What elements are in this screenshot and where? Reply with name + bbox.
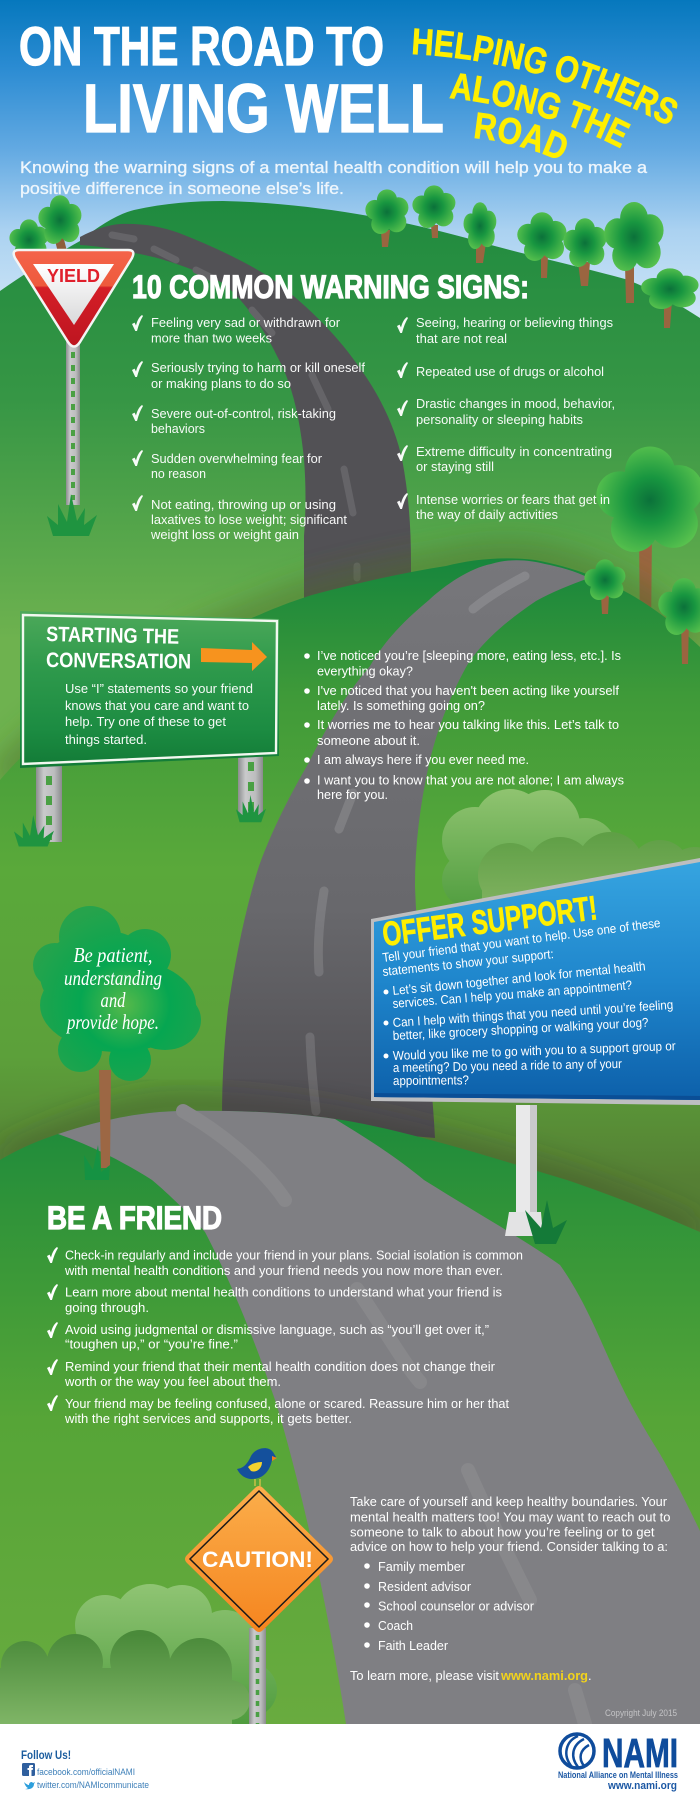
- self care text: Faith Leader: [378, 1638, 449, 1653]
- warning signs left column: no reason: [151, 466, 206, 481]
- heading: warning signs: 10 COMMON WARNING SIGNS:: [132, 269, 529, 305]
- billboard: offer support: a meeting? Do you need a ride to any of your: [393, 1056, 623, 1075]
- billboard: offer support: Would you like me to go with you to a support group or: [393, 1038, 677, 1063]
- icon: twitter: [24, 1782, 35, 1789]
- intro text: Knowing the warning signs of a mental health condition will help you to make a: [20, 158, 648, 177]
- self care text: mental health matters too! You may want to reach out to: [350, 1510, 670, 1524]
- yield sign: YIELD: [47, 266, 100, 286]
- self care text: Take care of yourself and keep healthy boundaries. Your: [350, 1494, 668, 1509]
- middle road: [222, 560, 589, 1138]
- tree text: understanding: [64, 966, 162, 990]
- self care text: .: [588, 1668, 592, 1683]
- warning signs left column: weight loss or weight gain: [150, 527, 299, 542]
- bush bottom left: [0, 1584, 277, 1724]
- self care text: To learn more, please visit: [350, 1668, 499, 1683]
- warning signs right column: [397, 315, 615, 522]
- self care text: School counselor or advisor: [378, 1598, 535, 1614]
- billboard: offer support: better, like grocery shopping or walking your dog?: [392, 1015, 649, 1043]
- self care text: Coach: [378, 1618, 413, 1633]
- small trees on middle hill: [584, 559, 700, 664]
- conversation statements: here for you.: [317, 787, 388, 802]
- green sign: starting the conversation: Use “I” statements so your friend: [65, 681, 253, 696]
- warning signs left column: Not eating, throwing up or using: [151, 497, 336, 512]
- warning signs right column: Intense worries or fears that get in: [416, 492, 610, 507]
- warning signs left column: behaviors: [151, 421, 205, 436]
- conversation statements: It worries me to hear you talking like this. Let’s talk to: [317, 717, 619, 732]
- warning signs left column: laxatives to lose weight; significant: [151, 512, 347, 527]
- billboard: offer support: appointments?: [393, 1072, 469, 1088]
- trees on far hill: [9, 185, 699, 328]
- sky background: [0, 0, 700, 330]
- be a friend list: worth or the way you feel about them.: [64, 1374, 281, 1389]
- warning signs right column: Seeing, hearing or believing things: [416, 315, 613, 330]
- self care text: www.nami.org: [500, 1668, 588, 1683]
- title: LIVING WELL: [83, 70, 444, 147]
- be a friend list: going through.: [65, 1300, 149, 1315]
- warning signs right column: Drastic changes in mood, behavior,: [416, 396, 615, 411]
- be a friend list: [47, 1247, 523, 1426]
- be a friend list: with the right services and supports, it gets better.: [64, 1411, 352, 1426]
- conversation statements: I want you to know that you are not alone; I am always: [317, 772, 624, 788]
- intro text: [20, 158, 648, 198]
- warning signs right column: Extreme difficulty in concentrating: [416, 444, 612, 459]
- arrow: [201, 642, 267, 671]
- warning signs right column: that are not real: [416, 331, 507, 346]
- tree text: Be patient,: [74, 943, 152, 967]
- warning signs right column: personality or sleeping habits: [416, 412, 583, 427]
- self care text: Resident advisor: [378, 1579, 472, 1594]
- hill shadow: [0, 1105, 700, 1232]
- tree text: and: [100, 988, 126, 1012]
- yield sign: [14, 250, 133, 536]
- green sign: starting the conversation: help. Try one of these to get: [65, 714, 226, 729]
- footer band: [0, 1724, 700, 1812]
- follow us: twitter.com/NAMIcommunicate: [37, 1780, 149, 1791]
- subtitle: helping others along the road: ALONG THE: [449, 73, 631, 148]
- warning signs right column: or staying still: [416, 459, 494, 474]
- be a friend list: Avoid using judgmental or dismissive language, such as “you’ll get over it,”: [65, 1322, 489, 1337]
- green sign: starting the conversation: CONVERSATION: [46, 649, 191, 674]
- title: [19, 15, 444, 147]
- follow us: [21, 1750, 149, 1791]
- tree text: [64, 943, 162, 1034]
- be a friend list: with mental health conditions and your friend needs you now more than ever.: [64, 1263, 503, 1278]
- warning signs left column: or making plans to do so: [151, 376, 291, 391]
- self care text: Family member: [378, 1559, 466, 1574]
- green sign: starting the conversation: [14, 611, 279, 846]
- conversation statements: I’ve noticed you’re [sleeping more, eating less, etc.]. Is: [317, 648, 621, 663]
- green sign: starting the conversation: STARTING THE: [46, 623, 179, 649]
- copyright: Copyright July 2015: [605, 1708, 677, 1718]
- icon: facebook: [22, 1763, 35, 1776]
- caution sign: CAUTION!: [202, 1547, 313, 1572]
- warning signs left column: Severe out-of-control, risk-taking: [151, 406, 336, 421]
- bushes behind billboard: [442, 789, 700, 925]
- billboard: offer support: [371, 858, 700, 1244]
- conversation statements: someone about it.: [317, 733, 420, 748]
- tree text: provide hope.: [65, 1010, 159, 1034]
- warning signs right column: Repeated use of drugs or alcohol: [416, 364, 604, 379]
- self care text: [350, 1494, 670, 1683]
- conversation statements: everything okay?: [317, 664, 413, 678]
- conversation statements: I've noticed that you haven't been acting like yourself: [317, 683, 619, 698]
- far road: [80, 224, 411, 620]
- self care text: someone to talk to about how you’re feeling or to get: [350, 1524, 655, 1540]
- warning signs left column: more than two weeks: [151, 330, 272, 346]
- billboard: offer support: Tell your friend that you want to help. Use one of these: [381, 915, 661, 965]
- warning signs left column: Seriously trying to harm or kill oneself: [151, 360, 365, 375]
- warning signs left column: Feeling very sad or withdrawn for: [151, 315, 341, 330]
- billboard: offer support: OFFER SUPPORT!: [380, 889, 599, 954]
- billboard: offer support: statements to show your support:: [382, 946, 554, 979]
- conversation statements: I am always here if you ever need me.: [317, 752, 529, 767]
- NAMI logo: [558, 1730, 678, 1792]
- front road: [58, 1111, 700, 1724]
- conversation statements: [304, 648, 624, 802]
- front hill: [0, 1111, 700, 1724]
- tree: right of warning signs: [596, 446, 700, 637]
- be a friend list: “toughen up,” or “you’re fine.”: [65, 1336, 238, 1352]
- billboard: offer support: Can I help with things that you need until you’re feeling: [392, 997, 674, 1030]
- intro text: positive difference in someone else’s life.: [20, 179, 344, 198]
- warning signs left column: [132, 315, 365, 542]
- be a friend list: Remind your friend that their mental health condition does not change their: [65, 1359, 496, 1374]
- hill shadow: [0, 558, 700, 780]
- billboard: offer support: services. Can I help you make an appointment?: [392, 977, 632, 1011]
- warning signs left column: Sudden overwhelming fear for: [151, 451, 323, 466]
- heading: be a friend: BE A FRIEND: [47, 1200, 222, 1236]
- follow us: Follow Us!: [21, 1750, 71, 1762]
- title: ON THE ROAD TO: [19, 15, 384, 77]
- follow us: facebook.com/officialNAMI: [37, 1767, 135, 1778]
- be a friend list: Learn more about mental health conditions to understand what your friend is: [65, 1284, 502, 1300]
- warning signs right column: the way of daily activities: [416, 507, 558, 522]
- be a friend list: Check-in regularly and include your friend in your plans. Social isolation is common: [65, 1248, 523, 1262]
- billboard: offer support: Let’s sit down together and look for mental health: [392, 958, 646, 998]
- caution sign: [185, 1486, 333, 1724]
- self care text: advice on how to help your friend. Consider talking to a:: [350, 1539, 668, 1554]
- icon: bluebird: [237, 1448, 277, 1486]
- green sign: starting the conversation: things started.: [65, 732, 147, 747]
- far hill: [0, 201, 700, 800]
- middle hill: [0, 558, 700, 1240]
- subtitle: helping others along the road: HELPING OTHERS: [412, 28, 678, 124]
- subtitle: helping others along the road: ROAD: [474, 112, 567, 158]
- be a friend list: Your friend may be feeling confused, alone or scared. Reassure him or her that: [65, 1396, 509, 1411]
- tree: be patient: [33, 906, 201, 1180]
- conversation statements: lately. Is something going on?: [317, 698, 485, 713]
- NAMI logo: www.nami.org: [607, 1780, 677, 1792]
- green sign: starting the conversation: knows that you care and want to: [65, 698, 249, 713]
